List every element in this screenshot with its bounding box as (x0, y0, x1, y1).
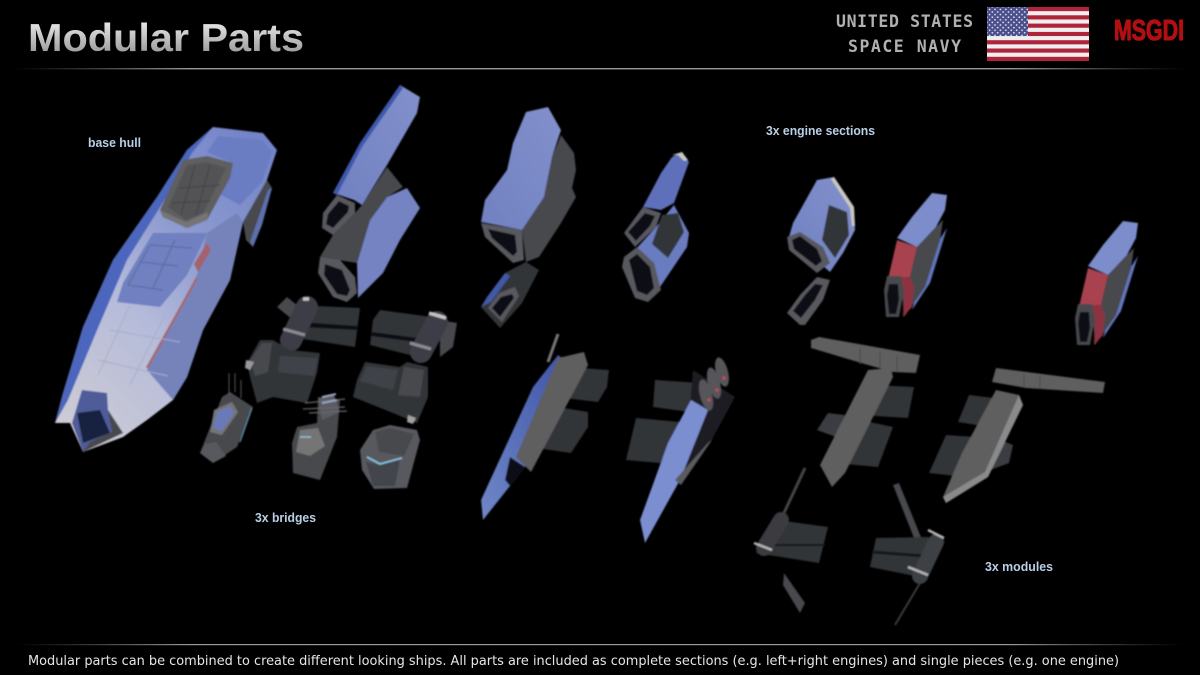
footer description: Modular parts can be combined to create different looking ships. All parts are included as complete sections (e.g. left+right engines) and single pieces (e.g. one engine) (28, 653, 1119, 669)
wing part grey D (929, 368, 1105, 503)
module with fins right (870, 483, 944, 625)
header: faction name (836, 12, 973, 56)
engine section: fourth pair (787, 177, 855, 325)
engine section: second pair (481, 107, 576, 328)
header: faction name: UNITED STATES (836, 12, 973, 31)
label: modules: 3x modules (985, 560, 1053, 574)
header: faction name: SPACE NAVY (848, 37, 961, 56)
engine section: third pair (622, 152, 689, 302)
wing part with blue blade B (626, 356, 735, 543)
engine section: red fifth (884, 193, 947, 317)
bridge two (292, 394, 347, 480)
module with fins left (754, 468, 828, 613)
module: connector right (370, 310, 457, 357)
parts artwork (55, 85, 1138, 625)
engine section: large pair (318, 85, 420, 302)
icon: US flag (987, 7, 1089, 61)
base hull (55, 127, 277, 452)
engine section: red sixth (1075, 221, 1138, 345)
bridge one (200, 373, 253, 463)
wing part grey C (811, 337, 920, 487)
module: block left (245, 340, 320, 403)
bridge three (360, 425, 420, 489)
title: Modular Parts (28, 17, 304, 60)
label: engine sections: 3x engine sections (766, 124, 875, 138)
label: base hull: base hull (88, 136, 141, 150)
wing part with blue blade A (481, 334, 609, 520)
module: connector left (277, 297, 360, 347)
label: bridges: 3x bridges (255, 511, 316, 525)
module: block right (353, 362, 428, 424)
